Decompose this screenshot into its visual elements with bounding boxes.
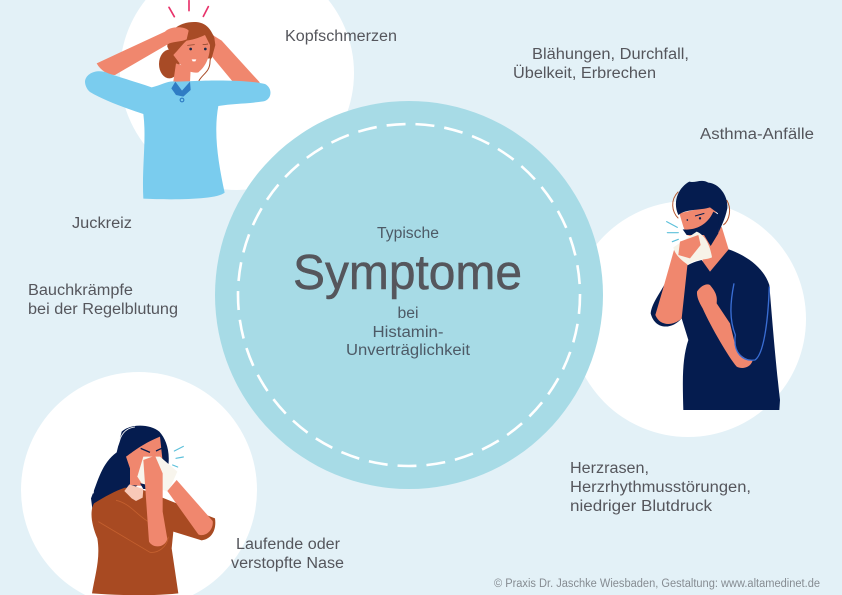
hair back [167, 22, 215, 60]
illustration: man coughing [651, 181, 780, 410]
label: Laufende Nase: verstopfte Nase [231, 555, 344, 572]
eyebrows [141, 448, 162, 452]
tissue [137, 457, 177, 492]
hair highlight [93, 427, 135, 493]
label: Bauchkrämpfe [28, 282, 178, 318]
label: Bauchkrämpfe: bei der Regelblutung [28, 301, 178, 318]
icon: sneeze marks [173, 446, 183, 467]
label: Asthma-Anfälle: Asthma-Anfälle [700, 126, 814, 143]
hair [676, 181, 727, 233]
label: Blähungen: Blähungen, Durchfall, [532, 46, 689, 63]
hand [678, 235, 701, 258]
neck and face [126, 437, 163, 487]
face [679, 205, 717, 242]
center text: Histamin- [372, 324, 444, 341]
center text [293, 225, 522, 359]
label: Herzrasen: niedriger Blutdruck [570, 498, 712, 515]
panel: center circle [215, 101, 603, 489]
eyes [189, 48, 192, 50]
far arm [211, 35, 260, 88]
label: Bauchkrämpfe: Bauchkrämpfe [28, 282, 133, 299]
illustration: woman blowing nose [91, 426, 215, 595]
beard [683, 212, 719, 246]
blue outline [731, 283, 769, 360]
center text: Typische [377, 225, 439, 242]
forearm on chest [697, 284, 753, 368]
title: Symptome [293, 246, 522, 300]
illustration: woman with headache [85, 1, 270, 199]
hair bun [159, 50, 180, 78]
hair [91, 426, 169, 517]
label: Blähungen [513, 46, 689, 82]
label: Kopfschmerzen: Kopfschmerzen [285, 28, 397, 45]
arm holding tissue [655, 250, 688, 324]
label: Juckreiz: Juckreiz [72, 215, 132, 232]
face [173, 35, 210, 73]
label: Herzrasen: Herzrasen, [570, 460, 649, 477]
label: Blähungen: Übelkeit, Erbrechen [513, 64, 656, 82]
label: Laufende Nase: Laufende oder [236, 536, 340, 553]
panel: white circle bottom left [21, 372, 257, 595]
dashed ring [238, 124, 580, 466]
mouth [192, 59, 196, 61]
near arm and hand [97, 27, 189, 75]
button [180, 98, 184, 102]
tissue [673, 232, 712, 265]
icon: pain marks [169, 1, 208, 17]
eyes [695, 213, 704, 216]
credit: © Praxis Dr. Jaschke Wiesbaden, Gestaltung: www.altamedinet.de [494, 578, 820, 590]
sweater [85, 71, 270, 199]
collar [124, 484, 143, 501]
panel: white circle right [570, 201, 806, 437]
label: Laufende Nase [231, 536, 344, 572]
center text: bei [398, 305, 418, 322]
center text: Unverträglichkeit [346, 342, 471, 359]
torso [651, 249, 780, 410]
sweater seams [98, 500, 168, 552]
arms [143, 456, 167, 546]
icon: cough marks [667, 222, 678, 242]
label: Herzrasen [570, 460, 751, 515]
hair strand [193, 23, 214, 88]
panel: white circle top [120, 0, 354, 190]
neck shadow [140, 483, 152, 489]
collar [171, 82, 191, 97]
neck [702, 227, 729, 272]
label: Herzrasen: Herzrhythmusstörungen, [570, 479, 751, 496]
hair strands [673, 192, 730, 225]
sweater [92, 488, 215, 595]
neck [173, 63, 191, 93]
